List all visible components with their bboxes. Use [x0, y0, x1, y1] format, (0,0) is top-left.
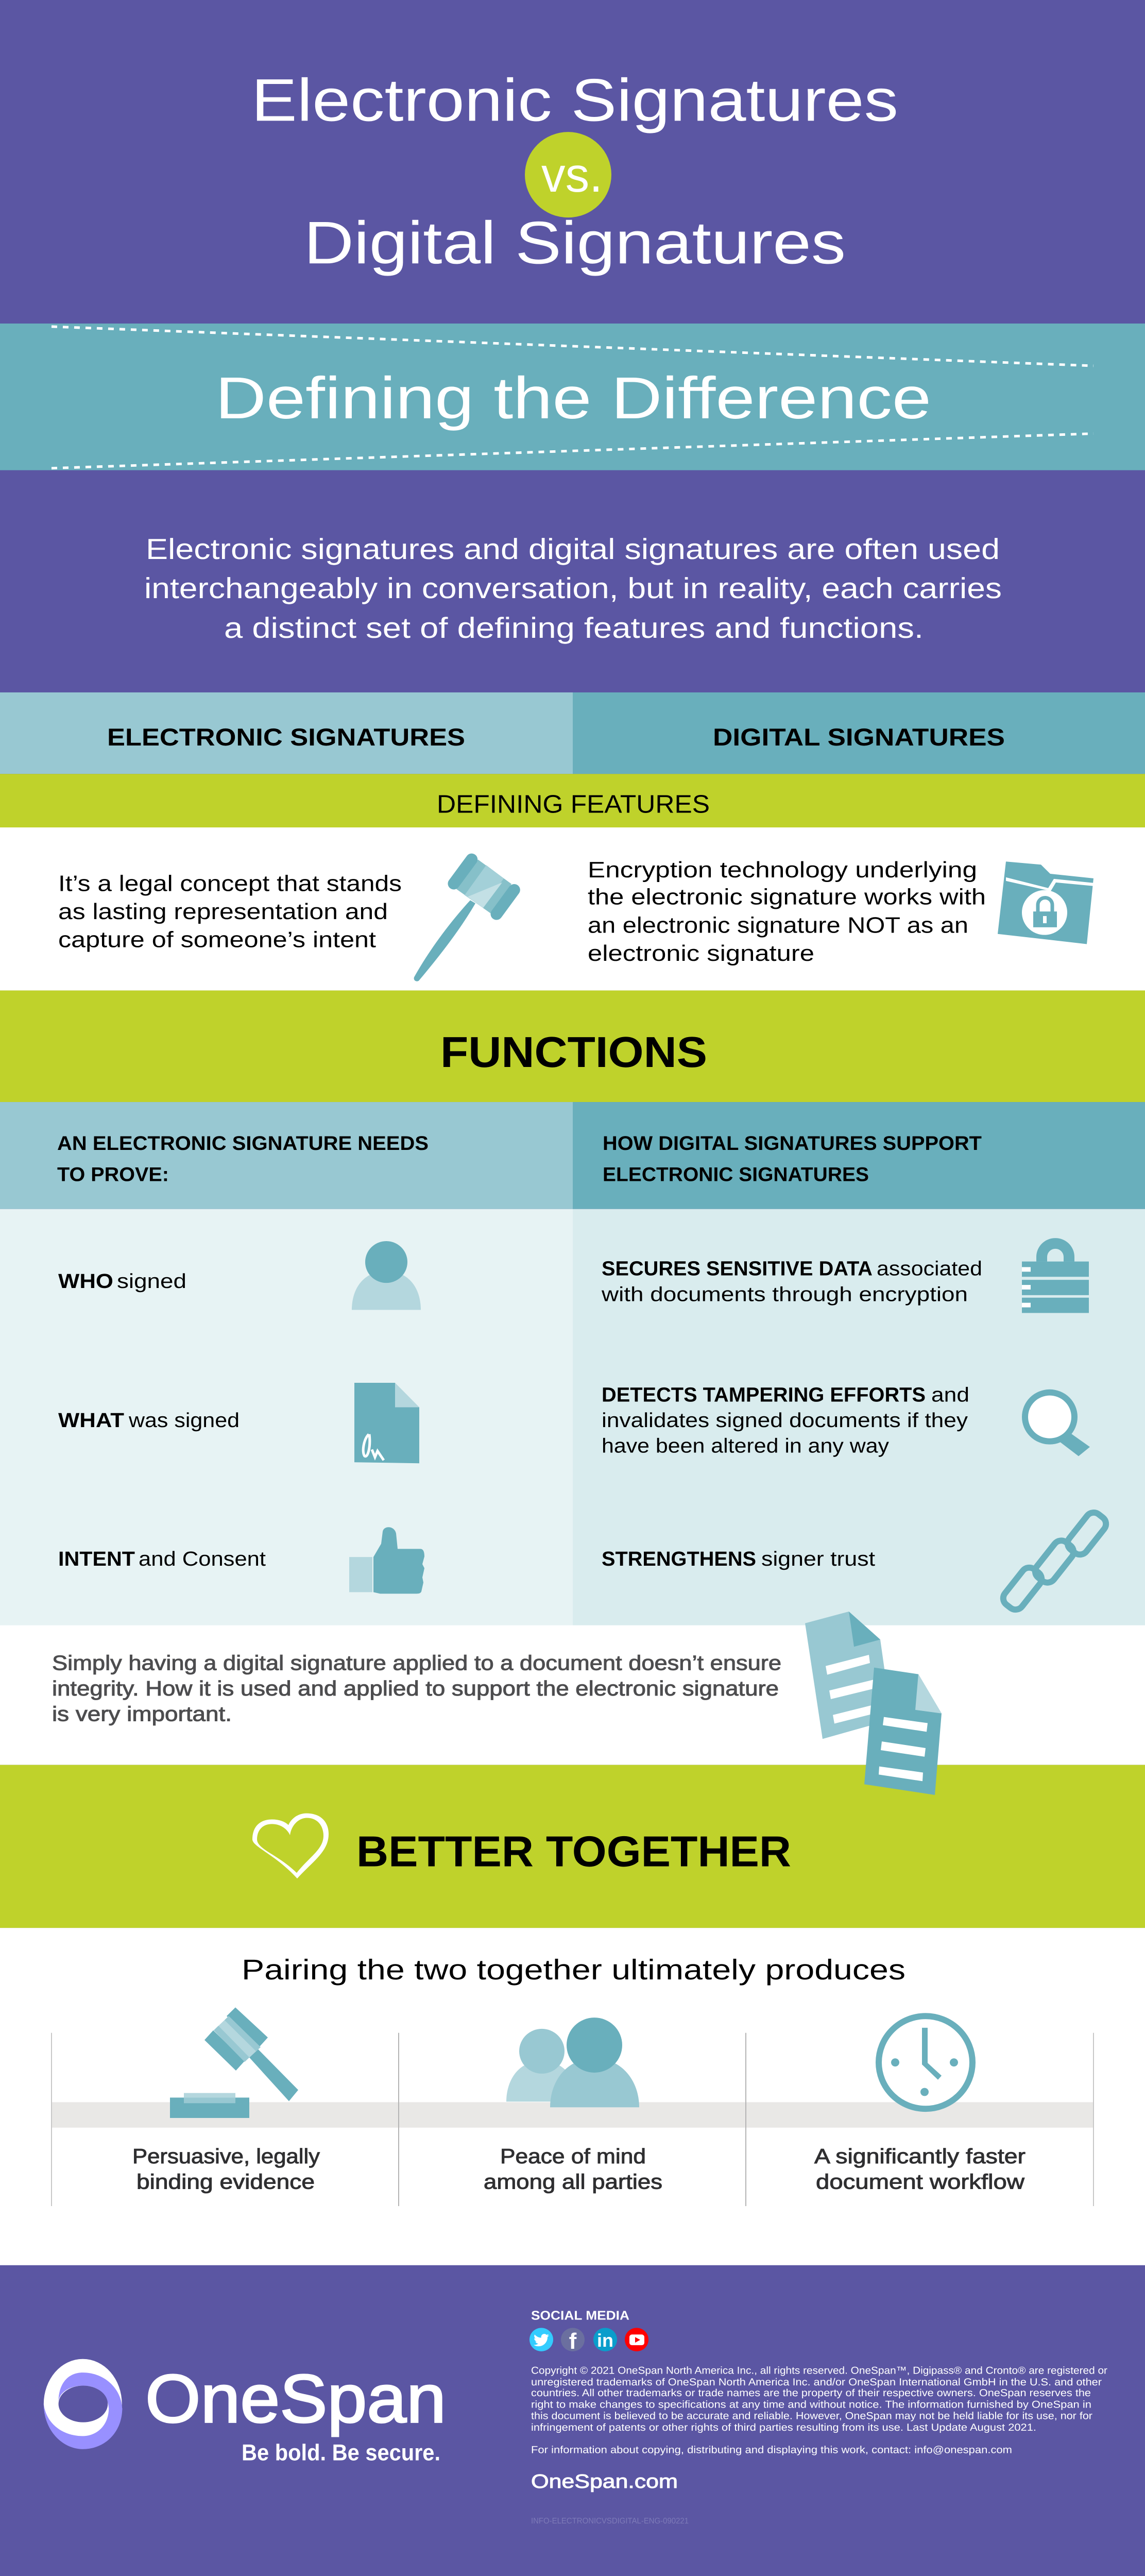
caption: peace of mind — [484, 2144, 662, 2193]
panel: integrity note — [0, 1625, 1145, 1765]
sub header: digital signatures support — [603, 1132, 982, 1185]
row: intent and consent: INTENT — [58, 1548, 135, 1570]
icon: linkedin — [593, 2328, 617, 2351]
panel: integrity note: integrity. How it is used and applied to support the electronic signature — [52, 1677, 779, 1700]
caption: faster workflow — [814, 2144, 1026, 2193]
caption: persuasive evidence: binding evidence — [136, 2170, 315, 2193]
outcomes heading: Pairing the two together ultimately produces — [242, 1954, 905, 1986]
row: detects tampering efforts: and — [931, 1384, 969, 1406]
panel: introduction: Electronic signatures and digital signatures are often used — [146, 533, 1000, 566]
row: strengthens signer trust: STRENGTHENS — [602, 1548, 756, 1570]
row: strengthens signer trust — [602, 1548, 875, 1570]
row: what was signed: was signed — [128, 1409, 240, 1432]
text: digital signature feature — [588, 857, 986, 966]
icon: facebook: f — [569, 2329, 577, 2354]
icon: youtube — [625, 2328, 648, 2351]
row: who signed — [58, 1270, 186, 1293]
icon: gavel and block — [170, 2007, 298, 2118]
panel: defining features content — [0, 827, 1145, 990]
icon: facebook — [561, 2328, 585, 2354]
title line two: Digital Signatures — [304, 209, 846, 277]
caption: peace of mind: Peace of mind — [500, 2144, 646, 2168]
panel: defining features strip — [0, 774, 1145, 827]
text: electronic signature feature: It’s a legal concept that stands — [58, 871, 402, 896]
icon: person — [352, 1241, 421, 1310]
panel: column headers: DIGITAL SIGNATURES — [713, 724, 1005, 751]
icon: gavel — [414, 859, 514, 981]
heading text: BETTER TOGETHER — [356, 1827, 791, 1876]
caption: peace of mind: among all parties — [484, 2170, 662, 2193]
row: detects tampering efforts — [602, 1384, 969, 1457]
icon: magnifying glass — [1022, 1389, 1090, 1456]
panel: defining features strip: DEFINING FEATURES — [437, 790, 710, 818]
panel: introduction — [0, 470, 1145, 693]
sub header: electronic signature needs — [57, 1132, 429, 1185]
text: electronic signature feature: capture of someone’s intent — [58, 927, 376, 952]
icon: padlock — [1022, 1238, 1089, 1313]
logo tagline: Be bold. Be secure. — [242, 2439, 440, 2465]
social media label: SOCIAL MEDIA — [531, 2309, 629, 2323]
panel: column headers — [0, 692, 1145, 774]
text: electronic signature feature — [58, 871, 402, 952]
icon: twitter — [529, 2328, 553, 2351]
logo wordmark: OneSpan — [145, 2361, 446, 2437]
panel: functions heading — [0, 990, 1145, 1102]
legal copy: unregistered trademarks of OneSpan North America Inc. and/or OneSpan International GmbH in the U.S. and other — [531, 2377, 1102, 2388]
caption: persuasive evidence — [132, 2144, 320, 2193]
icon: heart — [252, 1814, 329, 1878]
icon: thumbs up — [349, 1527, 424, 1594]
icon: overlapping documents — [805, 1612, 942, 1795]
panel: integrity note: is very important. — [52, 1702, 232, 1725]
legal copy: infringement of patents or other rights of third parties resulting from its use. Last Update August 2021. — [531, 2422, 1036, 2433]
panel: introduction: interchangeably in conversation, but in reality, each carries — [144, 572, 1002, 605]
contact line: For information about copying, distributing and displaying this work, contact: info@onespan.com — [531, 2445, 1012, 2456]
row: intent and consent: and Consent — [139, 1548, 266, 1570]
text: electronic signature feature: as lasting representation and — [58, 899, 388, 924]
text: digital signature feature: the electronic signature works with — [588, 885, 986, 909]
sub header: electronic signature needs: AN ELECTRONIC SIGNATURE NEEDS — [57, 1132, 429, 1155]
panel: defining the difference banner — [0, 324, 1145, 470]
panel: column headers: ELECTRONIC SIGNATURES — [107, 724, 465, 751]
row: strengthens signer trust: signer trust — [761, 1548, 875, 1570]
sub header: digital signatures support: ELECTRONIC SIGNATURES — [603, 1164, 869, 1185]
row: secures sensitive data: associated — [877, 1258, 982, 1280]
website: OneSpan.com — [531, 2471, 678, 2493]
panel: functions heading: FUNCTIONS — [440, 1028, 707, 1077]
icon: two people — [506, 2018, 639, 2107]
document code: INFO-ELECTRONICVSDIGITAL-ENG-090221 — [531, 2517, 689, 2526]
title line one: Electronic Signatures — [251, 67, 898, 134]
panel: better together heading — [0, 1765, 1145, 1928]
row: intent and consent — [58, 1548, 266, 1570]
panel: electronic signature proofs — [0, 1209, 573, 1626]
legal copy: this document is believed to be accurate and reliable. However, OneSpan may not be held liable for its use, nor for — [531, 2411, 1092, 2421]
legal copy: Copyright © 2021 OneSpan North America Inc., all rights reserved. OneSpan™, Digipass® and Cronto® are registered or — [531, 2365, 1107, 2376]
row: detects tampering efforts: have been altered in any way — [602, 1435, 889, 1457]
row: secures sensitive data: SECURES SENSITIVE DATA — [602, 1258, 873, 1280]
icon: linkedin: in — [597, 2330, 613, 2351]
panel: introduction: a distinct set of defining features and functions. — [224, 612, 924, 645]
row: detects tampering efforts: invalidates signed documents if they — [602, 1409, 968, 1432]
icon: clock — [879, 2016, 972, 2109]
row: secures sensitive data: with documents through encryption — [601, 1283, 968, 1306]
text: digital signature feature: electronic signature — [588, 941, 814, 966]
panel: title header — [0, 0, 1145, 324]
logo mark — [44, 2359, 122, 2449]
text: digital signature feature: an electronic signature NOT as an — [588, 913, 968, 938]
row: what was signed — [58, 1409, 240, 1432]
row: detects tampering efforts: DETECTS TAMPERING EFFORTS — [602, 1384, 926, 1406]
panel: integrity note: Simply having a digital signature applied to a document doesn’t ensure — [52, 1651, 781, 1675]
caption: faster workflow: A significantly faster — [814, 2144, 1026, 2168]
row: who signed: signed — [117, 1270, 186, 1293]
caption: persuasive evidence: Persuasive, legally — [132, 2144, 320, 2168]
vs badge: vs. — [541, 148, 603, 202]
panel: footer — [0, 2265, 1145, 2576]
sub header: digital signatures support: HOW DIGITAL SIGNATURES SUPPORT — [603, 1132, 982, 1155]
row: who signed: WHO — [58, 1270, 113, 1293]
banner heading: Defining the Difference — [215, 365, 931, 431]
panel: digital signature support — [573, 1209, 1145, 1626]
row: what was signed: WHAT — [58, 1409, 124, 1432]
panel: outcomes — [0, 1928, 1145, 2266]
legal copy: right to make changes to specifications at any time and without notice. The information furnished by OneSpan in — [531, 2399, 1091, 2411]
sub header: electronic signature needs: TO PROVE: — [57, 1164, 169, 1185]
icon: chain — [1000, 1510, 1109, 1613]
text: digital signature feature: Encryption technology underlying — [588, 857, 977, 883]
vs badge — [525, 132, 611, 217]
icon: signed document — [354, 1383, 419, 1463]
row: secures sensitive data — [601, 1258, 982, 1306]
legal copy: countries. All other trademarks or trade names are the property of their respective owners. OneSpan reserves the — [531, 2387, 1091, 2399]
caption: faster workflow: document workflow — [816, 2170, 1024, 2193]
panel: functions sub headers — [0, 1102, 1145, 1209]
icon: encrypted folder — [998, 861, 1093, 944]
legal copy — [531, 2365, 1107, 2433]
